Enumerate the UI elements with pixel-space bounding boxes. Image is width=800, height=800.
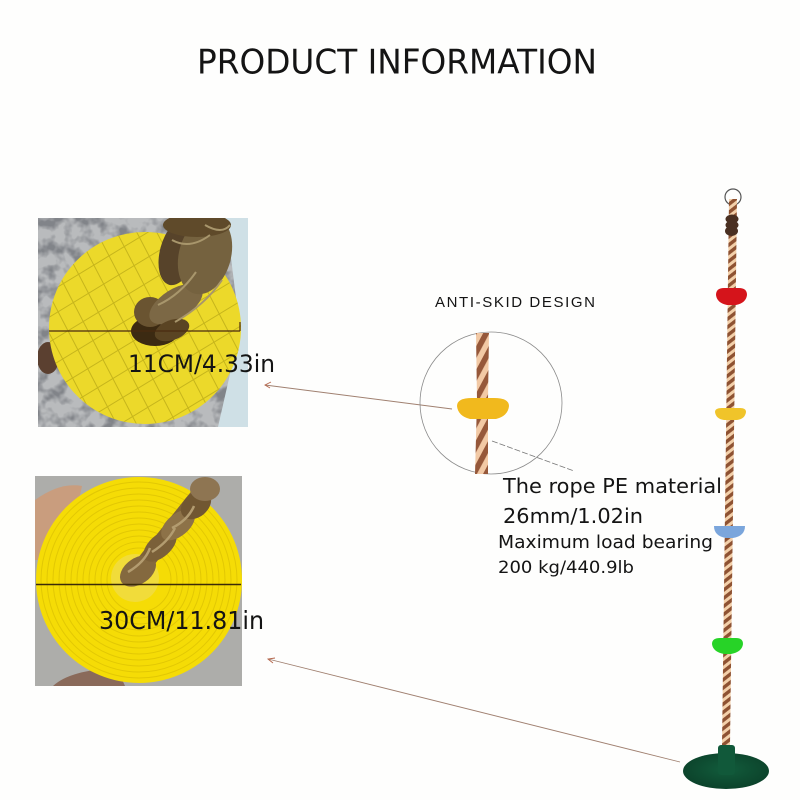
base disc (683, 745, 769, 789)
arrow: to small disc (265, 382, 452, 409)
rope detail (475, 333, 489, 474)
text: load bearing value: 200 kg/440.9lb (498, 558, 634, 578)
text: rope material: The rope PE material (502, 474, 722, 498)
icon: yellow disc with diamond grooves (49, 232, 241, 424)
yellow foothold detail (457, 398, 509, 419)
dimension line (49, 322, 240, 331)
dimension label: 11CM/4.33in (128, 350, 275, 378)
rope (722, 199, 737, 745)
icon: yellow disc with concentric grooves (36, 477, 242, 683)
panel: small disc photo (38, 218, 274, 427)
dimension line (36, 584, 241, 586)
icon: twisted rope end (131, 218, 232, 346)
green foothold (712, 638, 743, 654)
arrow: to base disc (268, 658, 680, 762)
illustration: climbing rope (683, 189, 769, 789)
title: PRODUCT INFORMATION (197, 42, 597, 82)
dashed leader (492, 441, 574, 471)
rope wrap (725, 214, 738, 236)
yellow foothold (715, 408, 746, 420)
callout: rope detail circle (420, 332, 574, 474)
panel: large disc photo (35, 476, 264, 686)
text: rope diameter: 26mm/1.02in (503, 504, 643, 528)
text: load bearing label: Maximum load bearing (498, 533, 713, 553)
icon: hanging ring (725, 189, 741, 205)
blue foothold (714, 526, 745, 538)
icon: twisted rope (120, 477, 220, 587)
red foothold (716, 288, 747, 305)
dimension label: 30CM/11.81in (99, 606, 264, 635)
heading: anti-skid design: ANTI-SKID DESIGN (435, 294, 595, 311)
